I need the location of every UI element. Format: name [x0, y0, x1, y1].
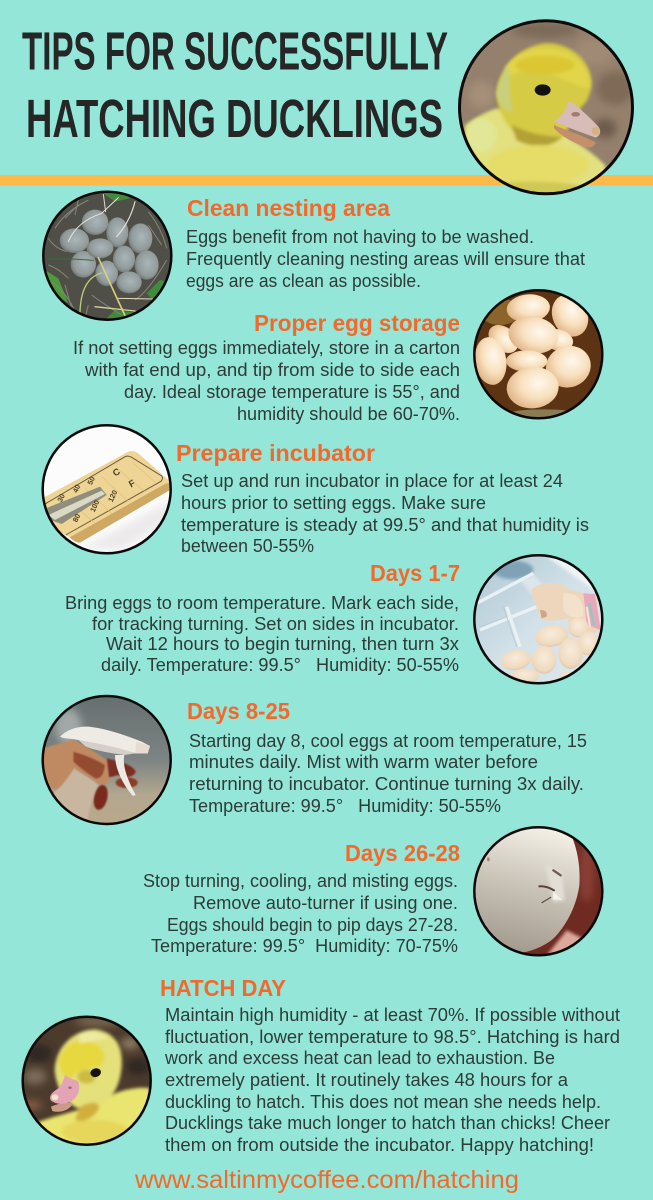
text: days 1-7: for tracking turning. Set on sides in incubator. [92, 613, 459, 634]
heading: proper egg storage: Proper egg storage [254, 310, 460, 336]
text: hatch day: fluctuation, lower temperature to 98.5°. Hatching is hard [165, 1026, 620, 1047]
text: prepare incubator: hours prior to setting eggs. Make sure [181, 492, 486, 513]
photo: hand holding a spray bottle [41, 694, 172, 826]
text: days 1-7: Wait 12 hours to begin turning, then turn 3x [106, 633, 460, 654]
section: clean nesting area [42, 190, 585, 323]
heading: prepare incubator: Prepare incubator [176, 440, 375, 466]
title [22, 22, 448, 149]
website url: www.saltinmycoffee.com/hatching [134, 1166, 519, 1194]
photo: wooden thermometer: 40 [71, 483, 82, 494]
section: days 1-7 [65, 550, 610, 690]
text: hatch day: them on from outside the incubator. Happy hatching! [165, 1134, 594, 1155]
text: proper egg storage [73, 337, 460, 424]
heading: days 8-25: Days 8-25 [187, 698, 290, 724]
text: prepare incubator [181, 470, 589, 556]
text: days 8-25 [189, 730, 587, 816]
photo: wooden thermometer: 100 [88, 499, 101, 514]
heading: days 26-28: Days 26-28 [345, 840, 460, 866]
text: clean nesting area: Eggs benefit from not having to be washed. [186, 226, 534, 247]
text: proper egg storage: If not setting eggs immediately, store in a carton [73, 337, 460, 358]
text: hatch day: Ducklings take much longer to hatch than chicks! Cheer [165, 1112, 610, 1133]
heading: hatch day: HATCH DAY [160, 975, 286, 1001]
text: proper egg storage: with fat end up, and tip from side to side each [84, 359, 460, 380]
photo: nest with grey eggs [42, 190, 175, 323]
photo: cream eggs in a bowl [473, 289, 604, 420]
text: hatch day: duckling to hatch. This does not mean she needs help. [165, 1091, 601, 1112]
photo: yellow duckling with pink beak [21, 1016, 152, 1146]
text: hatch day: extremely patient. It routinely takes 48 hours for a [165, 1069, 569, 1090]
text: days 26-28: Temperature: 99.5° Humidity: 70-75% [151, 935, 458, 956]
text: proper egg storage: day. Ideal storage temperature is 55°, and [124, 381, 460, 402]
text: days 1-7 [65, 592, 460, 675]
text: days 26-28: Stop turning, cooling, and misting eggs. [143, 870, 458, 891]
section: hatch day [15, 975, 620, 1155]
section: days 26-28 [143, 822, 610, 962]
text: days 8-25: minutes daily. Mist with warm water before [189, 751, 538, 772]
photo: wooden thermometer: 50 [85, 475, 97, 486]
text: prepare incubator: Set up and run incubator in place for at least 24 [181, 470, 563, 491]
text: days 8-25: Temperature: 99.5° Humidity: 50-55% [189, 795, 501, 816]
text: days 26-28: Eggs should begin to pip days 27-28. [167, 914, 458, 935]
text: prepare incubator: between 50-55% [181, 535, 314, 556]
text: clean nesting area: eggs are as clean as possible. [186, 270, 421, 291]
text: days 8-25: returning to incubator. Continue turning 3x daily. [189, 773, 584, 794]
text: clean nesting area: Frequently cleaning nesting areas will ensure that [186, 248, 585, 269]
text: proper egg storage: humidity should be 60-70%. [237, 403, 460, 424]
text: days 8-25: Starting day 8, cool eggs at room temperature, 15 [189, 730, 587, 751]
text: days 1-7: Bring eggs to room temperature. Mark each side, [65, 592, 459, 613]
title: HATCHING DUCKLINGS [26, 89, 443, 149]
photo: hand turning eggs in an incubator [473, 554, 604, 684]
section: days 8-25 [35, 690, 587, 830]
heading: days 1-7: Days 1-7 [370, 560, 460, 586]
text: clean nesting area [186, 226, 585, 291]
orange header band [0, 175, 653, 186]
text: hatch day: Maintain high humidity - at least 70%. If possible without [165, 1004, 620, 1025]
photo: yellow duckling [458, 19, 634, 196]
photo: egg beginning to pip [473, 826, 604, 956]
text: hatch day [164, 1004, 620, 1155]
text: days 26-28: Remove auto-turner if using one. [193, 892, 458, 913]
text: prepare incubator: temperature is steady at 99.5° and that humidity is [181, 514, 589, 535]
text: days 1-7: daily. Temperature: 99.5° Humidity: 50-55% [101, 654, 459, 675]
text: hatch day: work and excess heat can lead to exhaustion. Be [164, 1047, 555, 1068]
text: days 26-28 [143, 870, 458, 956]
photo: wooden thermometer: 120 [106, 489, 119, 504]
photo: wooden thermometer: 80 [71, 512, 82, 524]
section: prepare incubator [35, 420, 589, 560]
photo: wooden thermometer: C [111, 466, 122, 478]
section: proper egg storage [73, 285, 610, 425]
photo: wooden thermometer: 30 [55, 492, 67, 504]
photo: wooden thermometer [41, 424, 172, 554]
photo: wooden thermometer: F [127, 478, 137, 489]
heading: clean nesting area: Clean nesting area [187, 195, 390, 221]
